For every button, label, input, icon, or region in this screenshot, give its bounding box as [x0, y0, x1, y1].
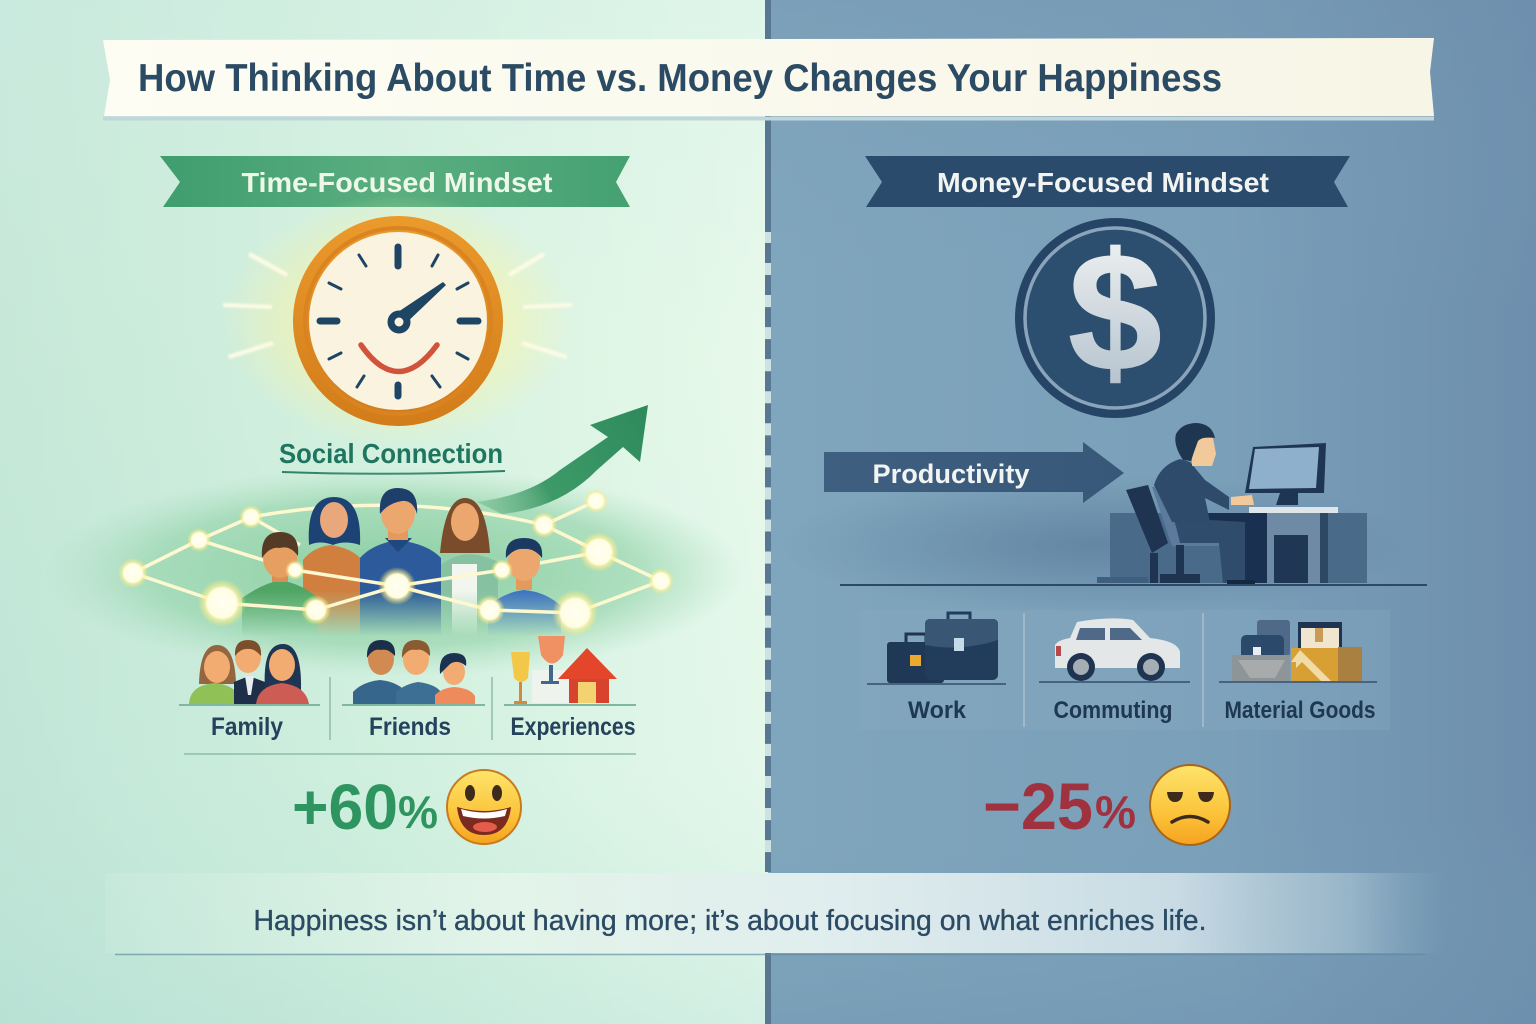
result: minus 25 percent: %: [1095, 786, 1136, 838]
panel: money-focused mindset: [824, 156, 1427, 845]
icon: dollar coin: [1015, 218, 1215, 418]
arrow: productivity: [824, 442, 1124, 503]
label: work: Work: [908, 697, 967, 724]
heading ribbon: money-focused mindset: Money-Focused Mindset: [937, 167, 1269, 198]
icon: briefcases: [887, 613, 998, 683]
person: [1174, 518, 1245, 583]
title banner: [103, 38, 1434, 118]
label: commuting: Commuting: [1054, 697, 1172, 724]
network lines behind people: [133, 501, 599, 573]
icon: material goods: [1232, 620, 1362, 682]
heading ribbon: time-focused mindset: [160, 156, 630, 207]
label: social connection: Social Connection: [279, 438, 503, 469]
group of people and connection network: [80, 405, 724, 668]
category row: work, commuting, material goods: [860, 610, 1390, 730]
desk: [1239, 513, 1267, 583]
result: minus 25 percent: [983, 765, 1230, 845]
icon: happy emoji: [447, 770, 521, 844]
background: time side: [0, 0, 768, 1024]
connection network: [118, 489, 674, 636]
label: experiences: Experiences: [510, 713, 636, 741]
arrow: productivity: Productivity: [872, 459, 1030, 489]
result: plus 60 percent: +60: [292, 771, 398, 843]
label: material goods: Material Goods: [1224, 697, 1376, 724]
growth arrow: [477, 405, 648, 514]
result: plus 60 percent: %: [398, 786, 438, 838]
monitor: [1245, 443, 1326, 493]
result: minus 25 percent: −25: [983, 769, 1093, 843]
heading ribbon: money-focused mindset: [865, 156, 1350, 207]
people: [242, 488, 561, 640]
icon: person at computer: [840, 423, 1427, 585]
takeaway text: Happiness isn’t about having more; it’s about focusing on what enriches life.: [254, 905, 1206, 937]
icon: friends: [353, 640, 475, 704]
category row: family, friends, experiences: [179, 636, 636, 754]
footer takeaway band: [105, 872, 1445, 954]
icon: sad emoji: [1150, 765, 1230, 845]
icon: smiling clock: [223, 195, 573, 445]
panel: time-focused mindset: [45, 156, 745, 844]
chair: [1126, 485, 1168, 553]
heading ribbon: time-focused mindset: Time-Focused Mindset: [242, 167, 552, 198]
label: friends: Friends: [369, 713, 451, 741]
center divider: [765, 0, 771, 1024]
result: plus 60 percent: [292, 770, 521, 844]
icon: experiences: [511, 636, 617, 704]
icon: dollar coin: $: [1068, 218, 1162, 406]
background: money side: [768, 0, 1536, 1024]
icon: car: [1055, 618, 1180, 681]
title: How Thinking About Time vs. Money Changes Your Happiness: [138, 57, 1222, 100]
icon: family: [189, 640, 309, 704]
label: family: Family: [211, 713, 283, 741]
